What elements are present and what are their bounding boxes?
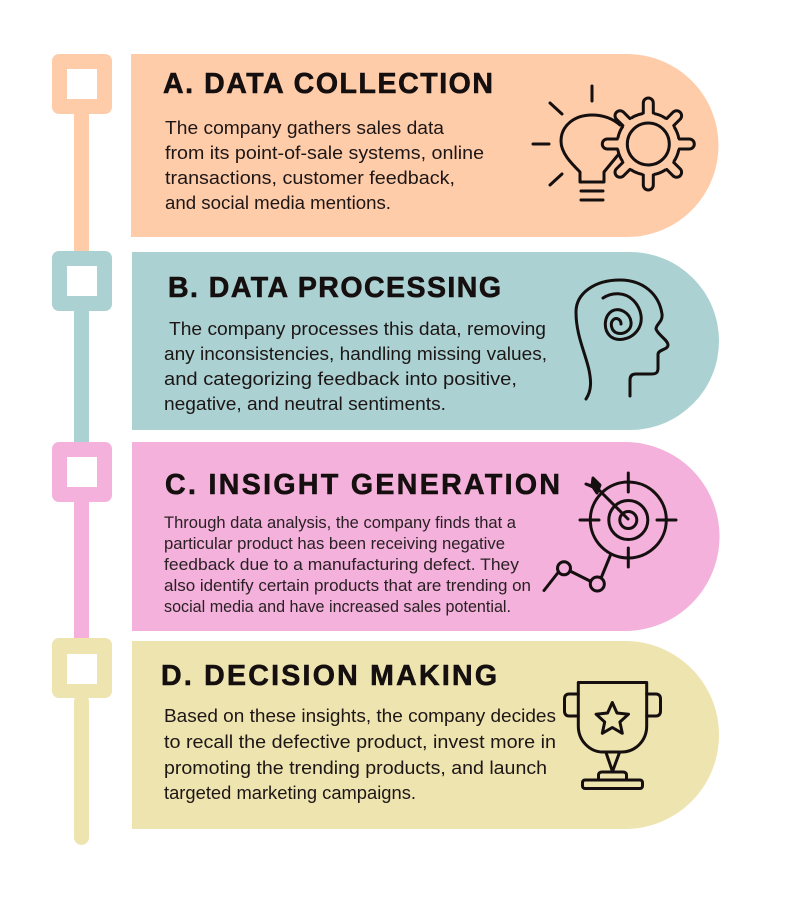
panel background C — [132, 442, 719, 631]
timeline node B — [52, 251, 112, 444]
body text A: and social media mentions. — [165, 192, 391, 213]
body text C: also identify certain products that are trending on — [164, 577, 531, 595]
heading A: A. DATA COLLECTION — [163, 68, 493, 100]
heading C: C. INSIGHT GENERATION — [165, 469, 560, 501]
heading D: D. DECISION MAKING — [161, 660, 497, 692]
body text A — [165, 117, 484, 213]
body text C: social media and have increased sales potential. — [164, 598, 511, 616]
body text A: from its point-of-sale systems, online — [165, 142, 484, 163]
timeline node C — [52, 442, 112, 640]
panel background B — [132, 252, 719, 430]
icon: trophy with star — [564, 682, 660, 788]
body text B: The company processes this data, removing — [169, 318, 546, 339]
icon: head with spiral — [576, 280, 668, 399]
body text A: The company gathers sales data — [165, 117, 445, 138]
timeline node A — [52, 54, 112, 254]
body text B: and categorizing feedback into positive, — [164, 368, 517, 389]
body text C — [164, 514, 531, 616]
panel background A — [131, 54, 718, 237]
body text D: Based on these insights, the company decides — [164, 705, 556, 726]
body text D: promoting the trending products, and launch — [164, 757, 547, 778]
timeline — [52, 54, 112, 845]
body text C: Through data analysis, the company finds that a — [164, 514, 517, 532]
heading B: B. DATA PROCESSING — [168, 272, 501, 304]
body text D: to recall the defective product, invest more in — [164, 731, 556, 752]
body text C: feedback due to a manufacturing defect. They — [164, 556, 520, 574]
body text B: any inconsistencies, handling missing values, — [164, 343, 547, 364]
body text B: negative, and neutral sentiments. — [164, 393, 446, 414]
panel background D — [132, 641, 719, 829]
body text D — [164, 705, 556, 803]
icon: target with arrow and trend line — [544, 473, 676, 591]
body text A: transactions, customer feedback, — [165, 167, 455, 188]
body text B — [164, 318, 547, 414]
body text C: particular product has been receiving negative — [164, 535, 505, 553]
timeline node D — [52, 638, 112, 845]
panel: B. Data Processing — [132, 252, 719, 430]
body text D: targeted marketing campaigns. — [164, 782, 416, 803]
panel: D. Decision Making — [132, 641, 719, 829]
icon: light bulb and gear — [533, 86, 694, 200]
panel: A. Data Collection — [131, 54, 718, 237]
panel: C. Insight Generation — [132, 442, 719, 631]
